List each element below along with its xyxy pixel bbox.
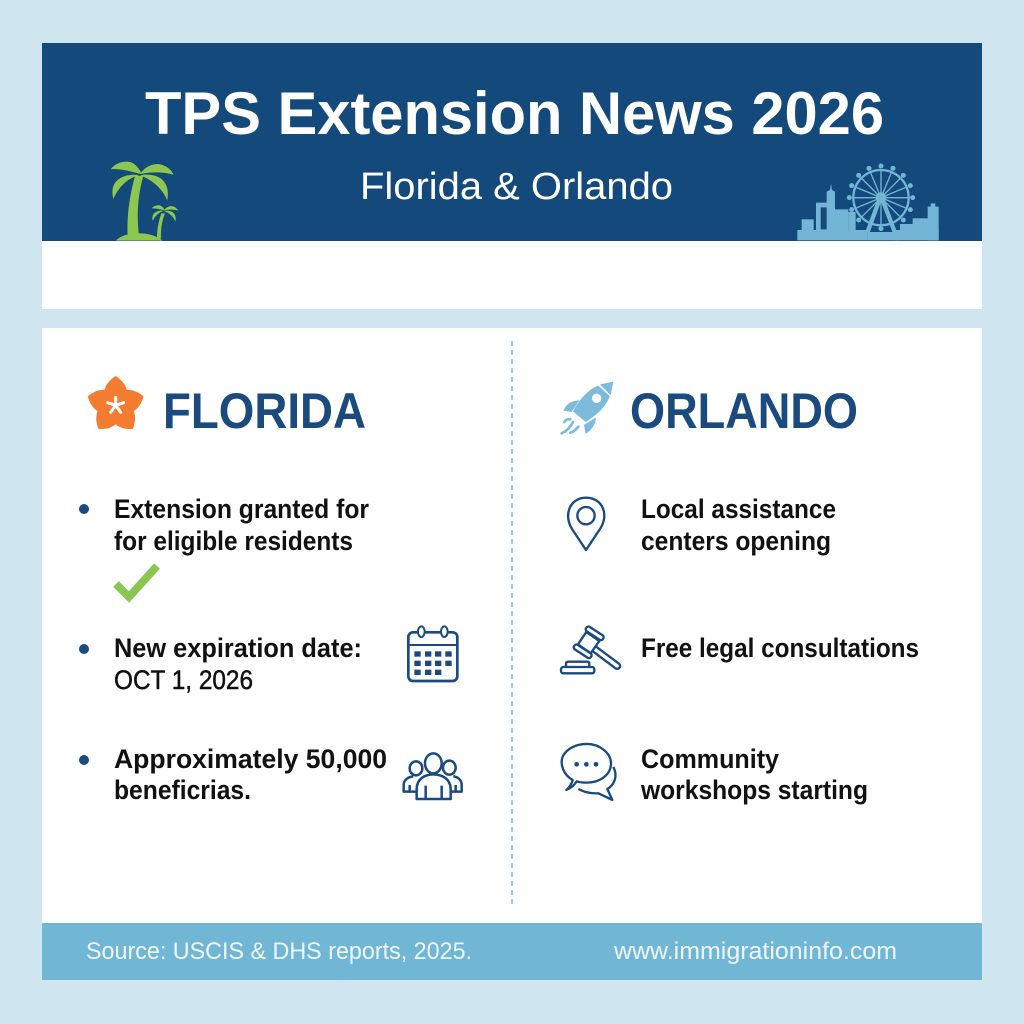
list item: community workshops — [640, 744, 868, 805]
icon: green check mark — [116, 566, 157, 597]
ferris wheel pods — [847, 163, 915, 231]
icon: people group — [404, 753, 462, 799]
list item: community workshops: workshops starting — [640, 775, 868, 805]
icon: calendar — [408, 626, 457, 681]
icon: map pin — [568, 498, 604, 550]
list item: extension granted — [79, 494, 369, 556]
icon: gavel — [561, 626, 620, 673]
list item: community workshops: Community — [641, 744, 779, 774]
heading: Orlando: ORLANDO — [630, 383, 858, 439]
list item: expiration date: OCT 1, 2026 — [114, 665, 253, 695]
list item: legal consultations: Free legal consultations — [641, 633, 919, 663]
list item: extension granted: for eligible residents — [114, 526, 353, 556]
list item: assistance centers: centers opening — [641, 526, 831, 556]
title: TPS Extension News 2026 — [145, 80, 884, 147]
list item: beneficiaries: beneficrias. — [114, 775, 251, 805]
list item: expiration date: New expiration date: — [114, 633, 362, 663]
subtitle: Florida & Orlando — [360, 166, 673, 208]
list item: assistance centers — [641, 494, 836, 556]
icon: Orlando skyline with ferris wheel — [797, 163, 939, 240]
list item: expiration date — [79, 633, 362, 695]
icon: orange flower — [84, 376, 147, 436]
heading: Florida: FLORIDA — [163, 383, 366, 439]
source note: Source: USCIS & DHS reports, 2025. — [86, 938, 472, 965]
icon: palm trees — [111, 162, 178, 241]
website: www.immigrationinfo.com — [613, 938, 897, 965]
list item: assistance centers: Local assistance — [641, 494, 836, 524]
list item: beneficiaries: Approximately 50,000 — [114, 744, 387, 774]
panel: header banner — [42, 43, 982, 241]
panel: footer — [42, 923, 982, 980]
list item: extension granted: Extension granted for — [114, 494, 369, 524]
list item: beneficiaries — [79, 744, 387, 805]
divider — [511, 341, 513, 908]
panel: white strip below header — [42, 241, 982, 309]
icon: chat bubbles — [562, 744, 615, 800]
panel: main content — [42, 328, 982, 923]
icon: rocket — [562, 382, 613, 434]
